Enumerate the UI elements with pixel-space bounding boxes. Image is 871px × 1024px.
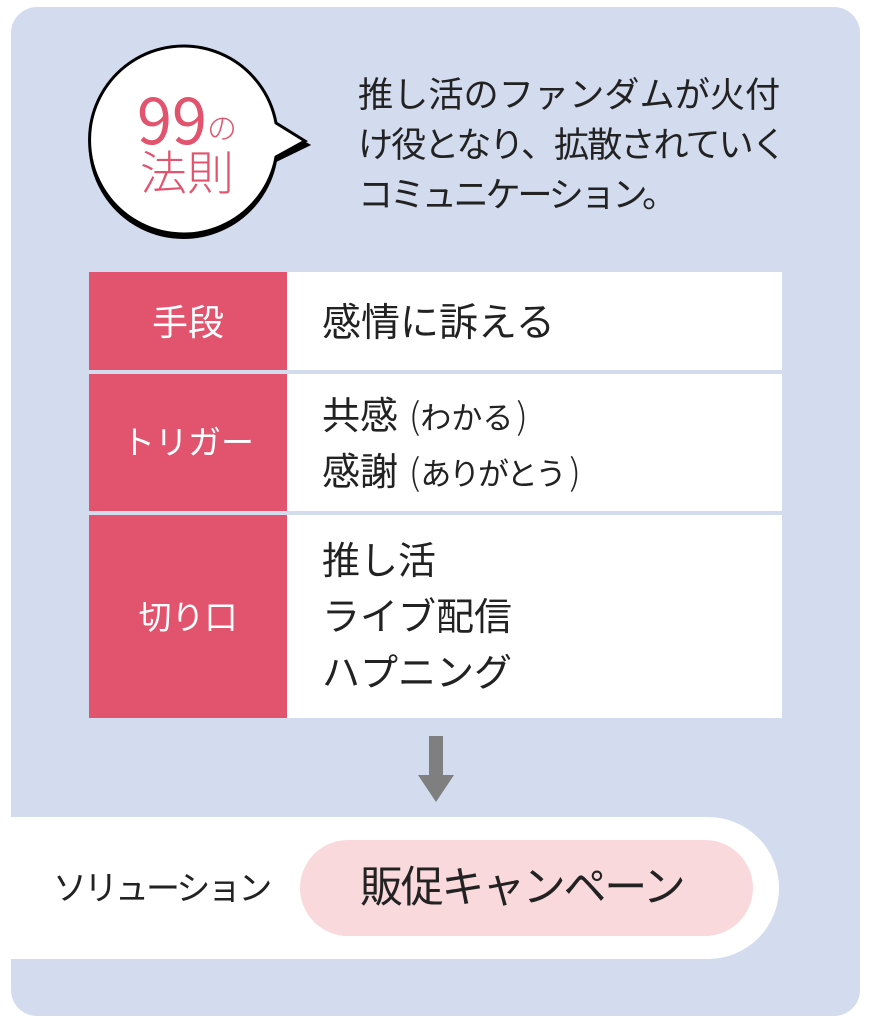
row header: トリガー: トリガー (122, 424, 254, 461)
speech bubble: 99の法則: 法則 (140, 147, 234, 200)
row content: 手段: 感情に訴える (322, 302, 555, 345)
arrow: down (418, 736, 454, 802)
speech bubble: 99の法則: 99 (137, 72, 207, 163)
row header: 手段: 手段 (152, 302, 224, 343)
row: 手段 (89, 272, 782, 370)
row content: 切り口: ライブ配信 (322, 597, 512, 639)
row header: 手段 (89, 272, 287, 370)
intro text: け役となり、拡散されていく (358, 126, 785, 165)
speech bubble: 99の法則 (88, 44, 311, 239)
pill: 販促キャンペーン (300, 840, 753, 936)
row content: 切り口: ハプニング (322, 653, 512, 695)
row header: 切り口 (89, 515, 287, 718)
row content: トリガー: 感謝 (ありがとう) (322, 444, 581, 496)
row content: 切り口 (287, 515, 782, 718)
intro text: コミュニケーション。 (358, 176, 674, 215)
row content: トリガー: 共感 (わかる) (322, 388, 528, 440)
intro text: 推し活のファンダムが火付 (358, 76, 780, 115)
row header: トリガー (89, 374, 287, 511)
pill: 販促キャンペーン: 販促キャンペーン (360, 864, 683, 912)
row content: 切り口: 推し活 (322, 541, 436, 583)
label: ソリューション: ソリューション (53, 870, 269, 908)
row header: 切り口: 切り口 (138, 599, 238, 636)
row content: 手段 (287, 272, 782, 370)
row content: トリガー (287, 374, 782, 511)
solution band (11, 817, 779, 959)
row: トリガー (89, 374, 782, 511)
row: 切り口 (89, 515, 782, 718)
intro text (358, 76, 785, 215)
speech bubble: 99の法則: の (207, 113, 237, 146)
